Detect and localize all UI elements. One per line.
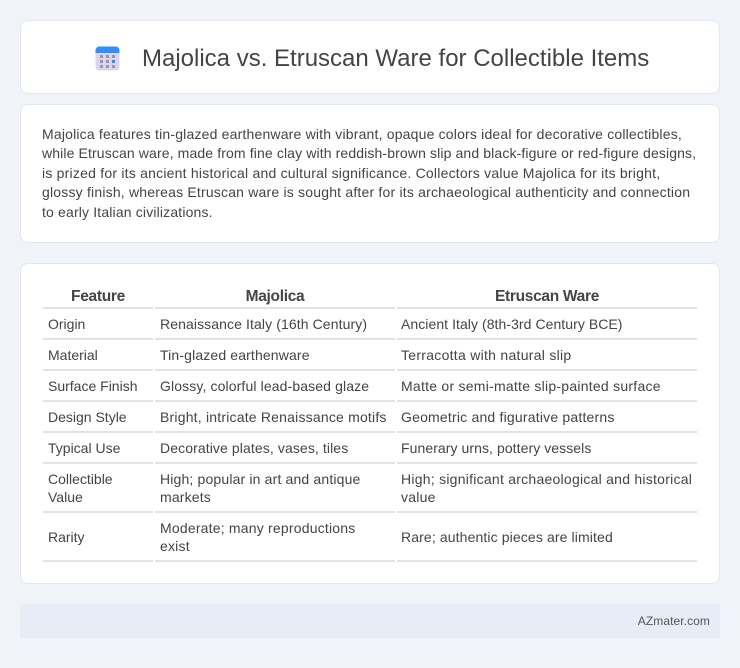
summary text: to early Italian civilizations. [42,204,213,220]
row: Rarity: Rarity [48,529,85,545]
header: Majolica: Majolica [246,288,304,305]
row: Material [48,347,571,363]
header: Feature: Feature [71,288,125,305]
row: Rarity [48,520,613,554]
summary text: glossy finish, whereas Etruscan ware is sought after for its archaeological authenticity and connection [42,184,690,200]
title: Majolica vs. Etruscan Ware for Collectible Items [142,45,649,72]
summary text [42,126,696,220]
row: Collectible Value [48,471,692,505]
row: Material: Terracotta with natural slip [401,347,571,363]
comparison table panel [20,263,720,584]
row: Surface Finish: Surface Finish [48,378,137,394]
row: Typical Use: Funerary urns, pottery vessels [401,440,591,456]
row: Origin [48,316,623,332]
row: Typical Use: Decorative plates, vases, tiles [160,440,348,456]
footer bar [20,604,720,638]
row: Rarity: Rare; authentic pieces are limited [401,529,613,545]
footer credit: AZmater.com [638,614,710,628]
row: Origin: Ancient Italy (8th-3rd Century BCE) [401,316,623,332]
row: Surface Finish: Glossy, colorful lead-based glaze [160,378,369,394]
row: Design Style: Bright, intricate Renaissance motifs [160,409,387,425]
summary text: while Etruscan ware, made from fine clay with reddish-brown slip and black-figure or red-figure designs, [42,145,696,161]
row: Typical Use: Typical Use [48,440,120,456]
summary text: Majolica features tin-glazed earthenware with vibrant, opaque colors ideal for decorative collectibles, [42,126,682,142]
row: Design Style [48,409,615,425]
row: Rarity: exist [160,538,190,554]
icon: calendar [96,46,120,70]
row: Origin: Origin [48,316,85,332]
row: Collectible Value: Value [48,489,83,505]
summary text: is prized for its ancient historical and cultural significance. Collectors value Majolica for its bright, [42,165,660,181]
row: Collectible Value: Collectible [48,471,113,487]
comparison table [43,288,697,562]
row: Collectible Value: High; popular in art and antique [160,471,360,487]
row: Design Style: Design Style [48,409,127,425]
summary panel [20,104,720,243]
row: Rarity: Moderate; many reproductions [160,520,355,536]
row: Material: Tin-glazed earthenware [160,347,310,363]
row: Origin: Renaissance Italy (16th Century) [160,316,367,332]
row: Collectible Value: markets [160,489,211,505]
row: Collectible Value: High; significant archaeological and historical [401,471,692,487]
row: Design Style: Geometric and figurative patterns [401,409,615,425]
row: Surface Finish: Matte or semi-matte slip-painted surface [401,378,661,394]
row: Typical Use [48,440,591,456]
header: Etruscan Ware: Etruscan Ware [495,288,599,305]
title card [20,20,720,94]
row: Material: Material [48,347,98,363]
row: Surface Finish [48,378,661,394]
row: Collectible Value: value [401,489,436,505]
